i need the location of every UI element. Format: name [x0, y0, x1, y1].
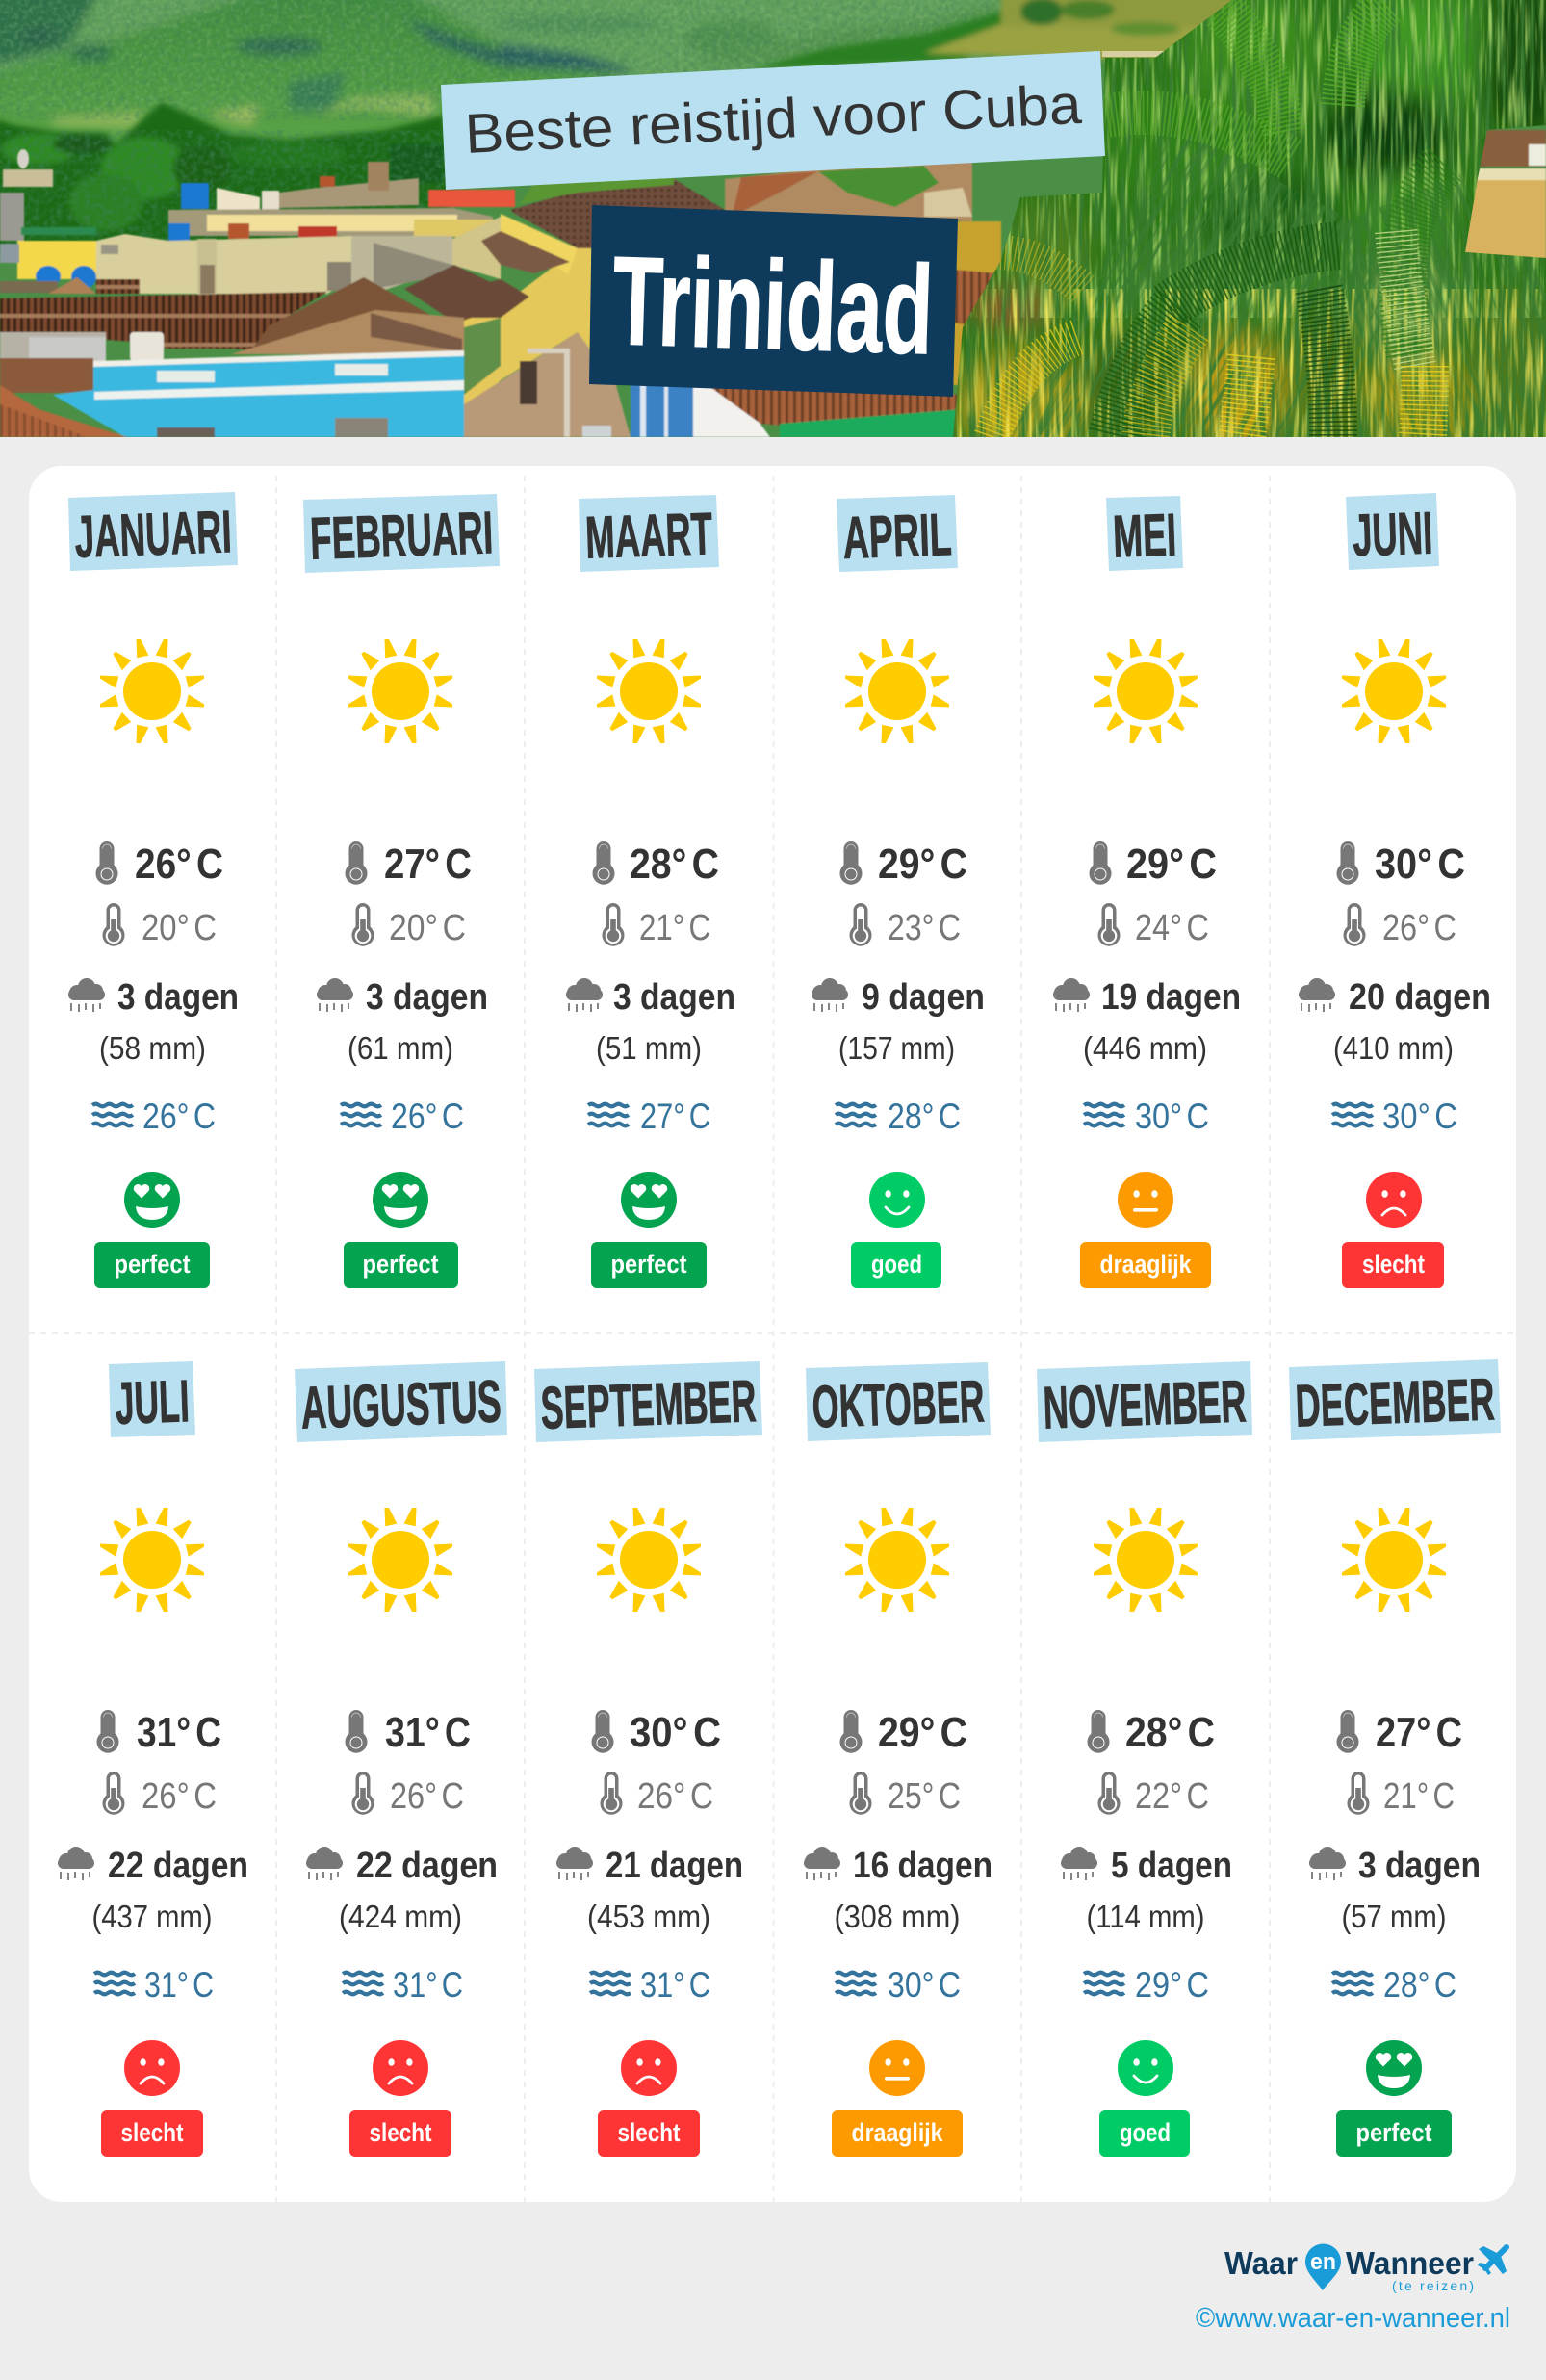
rain days: 3 dagen	[613, 977, 735, 1018]
icon: sun	[845, 639, 949, 743]
max temperature	[1090, 841, 1217, 888]
month label	[579, 495, 719, 572]
min temperature	[102, 903, 217, 948]
min temperature	[849, 1772, 961, 1817]
rating badge	[1342, 1242, 1444, 1288]
max temperature	[1336, 1709, 1462, 1756]
icon: rating face	[869, 2040, 925, 2096]
month label	[1346, 493, 1439, 570]
rating badge	[591, 1242, 707, 1288]
month label	[295, 1361, 507, 1442]
sea temperature	[836, 1965, 961, 2005]
month label: AUGUSTUS	[299, 1368, 502, 1442]
rain days: 22 dagen	[108, 1846, 248, 1886]
panel: maart	[566, 495, 735, 1288]
max temperature: 29° C	[878, 841, 967, 888]
panel: februari	[303, 494, 500, 1288]
max temperature	[345, 1709, 471, 1756]
sea temperature	[1332, 1097, 1457, 1136]
panel: mei	[1053, 496, 1241, 1288]
sea temperature: 31° C	[144, 1965, 214, 2005]
min temperature	[102, 1772, 217, 1817]
max temperature	[345, 841, 472, 888]
max temperature	[593, 841, 719, 888]
logo: Waar en Wanneer	[1224, 2243, 1507, 2293]
sea temperature	[588, 1097, 710, 1136]
rainfall: (424 mm)	[339, 1899, 462, 1934]
logo: Waar en Wanneer: (te reizen)	[1392, 2278, 1474, 2293]
month label: OKTOBER	[811, 1368, 986, 1441]
rain days	[566, 977, 735, 1018]
max temperature	[96, 1709, 221, 1756]
icon: sun	[1094, 639, 1198, 743]
min temperature: 22° C	[1135, 1776, 1209, 1817]
panel: september	[534, 1361, 762, 2157]
min temperature	[1348, 1772, 1455, 1817]
month label: JANUARI	[73, 499, 233, 571]
min temperature: 26° C	[637, 1776, 713, 1817]
icon: airplane	[1478, 2246, 1507, 2275]
rain days: 19 dagen	[1101, 977, 1241, 1018]
sea temperature	[1332, 1965, 1456, 2005]
logo: Waar en Wanneer: Waar	[1224, 2245, 1298, 2281]
min temperature	[1097, 1772, 1209, 1817]
icon: rating face	[1118, 1172, 1173, 1228]
rating badge: slecht	[1362, 1250, 1425, 1279]
month label	[806, 1362, 991, 1441]
rainfall: (61 mm)	[348, 1030, 453, 1066]
icon: map pin	[1305, 2243, 1341, 2290]
sea temperature: 31° C	[640, 1965, 710, 2005]
max temperature: 31° C	[385, 1709, 471, 1756]
sea temperature: 29° C	[1135, 1965, 1209, 2005]
destination banner: Trinidad: Trinidad	[610, 229, 936, 380]
min temperature: 26° C	[1382, 908, 1456, 948]
behind navy, lower middle	[631, 385, 693, 437]
rainfall: (453 mm)	[587, 1899, 710, 1934]
icon: rating face	[1118, 2040, 1173, 2096]
rating badge	[94, 1242, 210, 1288]
icon: rating face	[869, 1172, 925, 1228]
rainfall: (58 mm)	[99, 1030, 206, 1066]
max temperature	[591, 1709, 721, 1756]
tiled roofs	[0, 292, 327, 351]
icon: rating face	[621, 1172, 677, 1228]
min temperature	[601, 1772, 713, 1817]
logo: Waar en Wanneer: Wanneer	[1346, 2245, 1474, 2281]
behind title on the right	[725, 159, 972, 221]
rain days: 20 dagen	[1349, 977, 1491, 1018]
max temperature: 30° C	[630, 1709, 721, 1756]
month label	[68, 492, 238, 571]
rating badge: perfect	[114, 1250, 191, 1279]
rating badge	[344, 1242, 458, 1288]
rain days	[804, 1846, 992, 1886]
rain days: 3 dagen	[366, 977, 488, 1018]
sea temperature	[590, 1965, 710, 2005]
panel: november	[1037, 1361, 1252, 2157]
min temperature: 25° C	[888, 1776, 961, 1817]
left tree belt	[0, 102, 457, 250]
blue house	[53, 353, 464, 437]
title banner: Beste reistijd voor Cuba	[441, 51, 1105, 190]
rating badge	[1336, 2110, 1452, 2157]
month label	[303, 494, 500, 573]
icon: sun	[845, 1508, 949, 1612]
min temperature: 20° C	[142, 908, 217, 948]
month label: MEI	[1112, 502, 1177, 571]
destination banner: Trinidad	[589, 205, 958, 397]
month label	[1106, 496, 1183, 571]
max temperature	[1336, 841, 1465, 888]
header photo: Trinidad rooftops with mountains and palm trees	[0, 0, 1546, 437]
min temperature: 21° C	[639, 908, 710, 948]
icon: sun	[1094, 1508, 1198, 1612]
icon: sun	[597, 1508, 701, 1612]
rain days	[556, 1846, 743, 1886]
rain days	[1061, 1846, 1232, 1886]
rain days	[317, 977, 488, 1018]
month label	[534, 1361, 762, 1442]
month label	[109, 1361, 195, 1437]
min temperature: 21° C	[1383, 1776, 1455, 1817]
hill right	[751, 0, 1251, 69]
sea temperature: 26° C	[391, 1097, 464, 1136]
sea temperature: 30° C	[888, 1965, 961, 2005]
month label: SEPTEMBER	[539, 1368, 758, 1442]
icon: rating face	[621, 2040, 677, 2096]
rating badge: perfect	[610, 1250, 687, 1279]
panel: december	[1289, 1359, 1501, 2157]
month label: FEBRUARI	[309, 500, 494, 573]
sea temperature: 27° C	[640, 1097, 710, 1136]
min temperature	[849, 903, 961, 948]
min temperature	[352, 1772, 464, 1817]
max temperature	[1088, 1709, 1215, 1756]
max temperature: 28° C	[1125, 1709, 1215, 1756]
rating badge: slecht	[121, 2118, 183, 2147]
rain days	[1299, 977, 1491, 1018]
min temperature	[1097, 903, 1209, 948]
icon: rating face	[124, 1172, 180, 1228]
rain days: 5 dagen	[1111, 1846, 1232, 1886]
rain days: 16 dagen	[853, 1846, 992, 1886]
rain days	[1309, 1846, 1481, 1886]
rainfall: (437 mm)	[92, 1899, 212, 1934]
town buildings	[0, 149, 1011, 437]
month label: NOVEMBER	[1042, 1368, 1248, 1442]
rain days	[306, 1846, 498, 1886]
rain days: 21 dagen	[606, 1846, 743, 1886]
rating badge: draaglijk	[1099, 1250, 1192, 1279]
max temperature: 29° C	[1126, 841, 1217, 888]
rating badge	[832, 2110, 963, 2157]
min temperature: 24° C	[1135, 908, 1209, 948]
rain days	[812, 977, 985, 1018]
month label: JULI	[114, 1368, 191, 1437]
panel: juni	[1299, 493, 1491, 1288]
icon: rating face	[1366, 2040, 1422, 2096]
month label: APRIL	[841, 502, 953, 572]
rating badge	[101, 2110, 203, 2157]
icon: rating face	[124, 2040, 180, 2096]
yellow street houses	[464, 248, 592, 414]
rainfall: (114 mm)	[1086, 1899, 1205, 1934]
palm foliage	[953, 0, 1546, 437]
rating badge: goed	[1120, 2118, 1171, 2147]
sea temperature	[343, 1965, 463, 2005]
max temperature: 31° C	[137, 1709, 221, 1756]
rating badge	[1080, 1242, 1211, 1288]
min temperature	[1344, 903, 1456, 948]
sea temperature: 28° C	[1383, 1965, 1456, 2005]
sea temperature	[836, 1097, 961, 1136]
sea temperature	[1084, 1965, 1209, 2005]
rain days	[58, 1846, 248, 1886]
min temperature: 23° C	[888, 908, 961, 948]
rainfall: (51 mm)	[596, 1030, 702, 1066]
rain days: 3 dagen	[1358, 1846, 1481, 1886]
icon: rating face	[373, 1172, 428, 1228]
rating badge	[349, 2110, 451, 2157]
rain days: 3 dagen	[117, 977, 239, 1018]
rainfall: (410 mm)	[1333, 1030, 1454, 1066]
icon: sun	[1342, 1508, 1446, 1612]
rain days: 9 dagen	[862, 977, 985, 1018]
min temperature: 20° C	[389, 908, 466, 948]
panel: augustus	[295, 1361, 507, 2157]
icon: sun	[348, 639, 452, 743]
max temperature	[839, 841, 967, 888]
website credit: ©www.waar-en-wanneer.nl	[1196, 2303, 1510, 2334]
panel: juli	[58, 1361, 248, 2157]
max temperature: 29° C	[878, 1709, 967, 1756]
icon: sun	[348, 1508, 452, 1612]
rating badge	[1099, 2110, 1190, 2157]
max temperature: 26° C	[135, 841, 223, 888]
panel: monthly climate card	[29, 466, 1516, 2202]
max temperature: 27° C	[1376, 1709, 1462, 1756]
min temperature: 26° C	[390, 1776, 464, 1817]
rating badge: draaglijk	[851, 2118, 943, 2147]
month label	[1037, 1361, 1252, 1442]
rainfall: (308 mm)	[834, 1899, 961, 1934]
min temperature	[603, 903, 710, 948]
min temperature	[352, 903, 466, 948]
icon: sun	[597, 639, 701, 743]
rating badge	[598, 2110, 700, 2157]
rain days	[1053, 977, 1241, 1018]
right building	[1465, 129, 1546, 258]
rating badge: goed	[871, 1250, 922, 1279]
rainfall: (57 mm)	[1342, 1899, 1446, 1934]
rainfall: (446 mm)	[1083, 1030, 1207, 1066]
sea temperature: 28° C	[888, 1097, 961, 1136]
icon: rating face	[1366, 1172, 1422, 1228]
rain days: 22 dagen	[356, 1846, 498, 1886]
panel: april	[812, 495, 985, 1288]
sea temperature	[341, 1097, 464, 1136]
sea temperature: 30° C	[1135, 1097, 1209, 1136]
min temperature: 26° C	[142, 1776, 217, 1817]
rainfall: (157 mm)	[838, 1030, 955, 1066]
icon: sun	[1342, 639, 1446, 743]
max temperature: 30° C	[1375, 841, 1465, 888]
sea temperature	[1084, 1097, 1209, 1136]
sea temperature: 26° C	[142, 1097, 216, 1136]
sea temperature	[92, 1097, 216, 1136]
icon: sun	[100, 639, 204, 743]
rating badge	[851, 1242, 941, 1288]
sea temperature: 31° C	[393, 1965, 463, 2005]
rating badge: slecht	[618, 2118, 680, 2147]
month label: MAART	[584, 501, 713, 572]
icon: map pin: en	[1310, 2249, 1336, 2275]
rating badge: slecht	[370, 2118, 431, 2147]
max temperature	[96, 841, 223, 888]
max temperature: 27° C	[384, 841, 472, 888]
sea temperature: 30° C	[1382, 1097, 1457, 1136]
rating badge: perfect	[1355, 2118, 1432, 2147]
panel: oktober	[804, 1362, 992, 2157]
rain days	[68, 977, 239, 1018]
month label: JUNI	[1352, 501, 1433, 569]
rating badge: perfect	[362, 1250, 439, 1279]
icon: sun	[100, 1508, 204, 1612]
panel: januari	[68, 492, 239, 1288]
max temperature: 28° C	[630, 841, 719, 888]
icon: rating face	[373, 2040, 428, 2096]
max temperature	[839, 1709, 967, 1756]
month label	[837, 495, 958, 572]
title banner: Beste reistijd voor Cuba: Beste reistijd voor Cuba	[463, 73, 1084, 166]
sea temperature	[94, 1965, 214, 2005]
